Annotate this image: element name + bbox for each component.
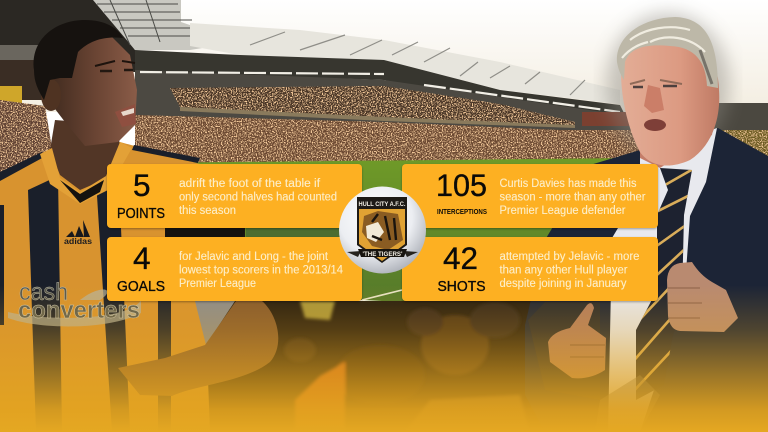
sponsor logo: cash [19, 279, 68, 306]
description: despite joining in January [500, 278, 627, 290]
jersey stripes [0, 145, 200, 432]
stat unit: POINTS [117, 206, 165, 222]
badge ribbon: 'THE TIGERS' [362, 252, 403, 258]
description: Curtis Davies has made this [500, 178, 637, 190]
description [500, 178, 646, 217]
stadium stands [0, 0, 768, 172]
description: season - more than any other [500, 192, 646, 204]
adidas logo [64, 220, 93, 246]
description [179, 178, 337, 217]
stat unit: GOALS [117, 279, 165, 295]
sponsor logo [8, 279, 141, 326]
collar [40, 142, 132, 204]
right stand crowd [700, 130, 768, 158]
tiger [362, 211, 403, 250]
player: Curtis Davies [0, 20, 278, 432]
head glow [606, 13, 730, 157]
v-neck [60, 180, 104, 203]
badge title: HULL CITY A.F.C. [358, 201, 406, 208]
tier divider [180, 107, 575, 128]
back wall [135, 70, 640, 165]
lower tier crowd [135, 115, 640, 166]
icon: Hull City badge [339, 186, 426, 274]
manager: Steve Bruce [525, 13, 768, 432]
stand lights [140, 72, 620, 112]
white roof truss [93, 0, 240, 50]
mouth [644, 119, 666, 131]
ear [41, 79, 61, 111]
description: lowest top scorers in the 2013/14 [179, 264, 344, 276]
main white roof [190, 23, 620, 104]
left roof [0, 0, 135, 72]
panel: 5 points [107, 164, 362, 228]
description: Premier League defender [500, 205, 626, 217]
left stand banner [0, 86, 22, 103]
description: adrift the foot of the table if [179, 178, 321, 190]
shoe glint [595, 375, 660, 432]
hair [617, 17, 718, 88]
brows and eyes [630, 80, 682, 84]
panel: 4 goals [107, 237, 362, 301]
description [500, 251, 640, 290]
face [48, 30, 137, 146]
left hand [548, 303, 606, 378]
description [179, 251, 344, 290]
description: this season [179, 205, 236, 217]
stat number: 5 [133, 167, 151, 203]
right hand [667, 262, 738, 332]
pitch line [362, 290, 402, 300]
left arm texture [528, 302, 600, 400]
black panel [165, 228, 245, 302]
description: than any other Hull player [500, 264, 628, 276]
neck [640, 120, 714, 168]
pitch [135, 158, 640, 304]
arm [118, 301, 278, 396]
eyes and brow [95, 61, 135, 66]
panel: 105 interceptions [402, 164, 658, 228]
stat unit: SHOTS [438, 279, 486, 295]
description: Premier League [179, 278, 256, 290]
panel: 42 shots [402, 237, 658, 301]
left stand crowd [0, 100, 56, 172]
red boards [582, 112, 642, 126]
sky [0, 0, 768, 112]
stat number: 105 [436, 167, 487, 203]
under roof [135, 50, 630, 125]
mouth [115, 104, 136, 127]
jersey [0, 142, 215, 432]
grey gap [195, 301, 235, 345]
neck [50, 120, 120, 190]
description: for Jelavic and Long - the joint [179, 251, 329, 263]
description: attempted by Jelavic - more [500, 251, 640, 263]
sponsor logo: converters [18, 297, 140, 324]
upper tier crowd [170, 86, 575, 125]
hair [34, 20, 123, 100]
description: only second halves had counted [179, 192, 337, 204]
right stand [700, 103, 768, 130]
stat unit: INTERCEPTIONS [437, 209, 487, 216]
left stand wall [0, 45, 60, 60]
nose [644, 85, 664, 113]
gold fade overlay [0, 285, 768, 432]
shield [357, 197, 407, 263]
tie [636, 168, 692, 400]
suit [525, 128, 768, 432]
stat number: 4 [133, 240, 151, 276]
face [621, 38, 719, 166]
adidas logo: adidas [64, 237, 93, 246]
stat number: 42 [443, 240, 478, 276]
crowd foreground [180, 301, 620, 432]
shirt [608, 128, 717, 432]
